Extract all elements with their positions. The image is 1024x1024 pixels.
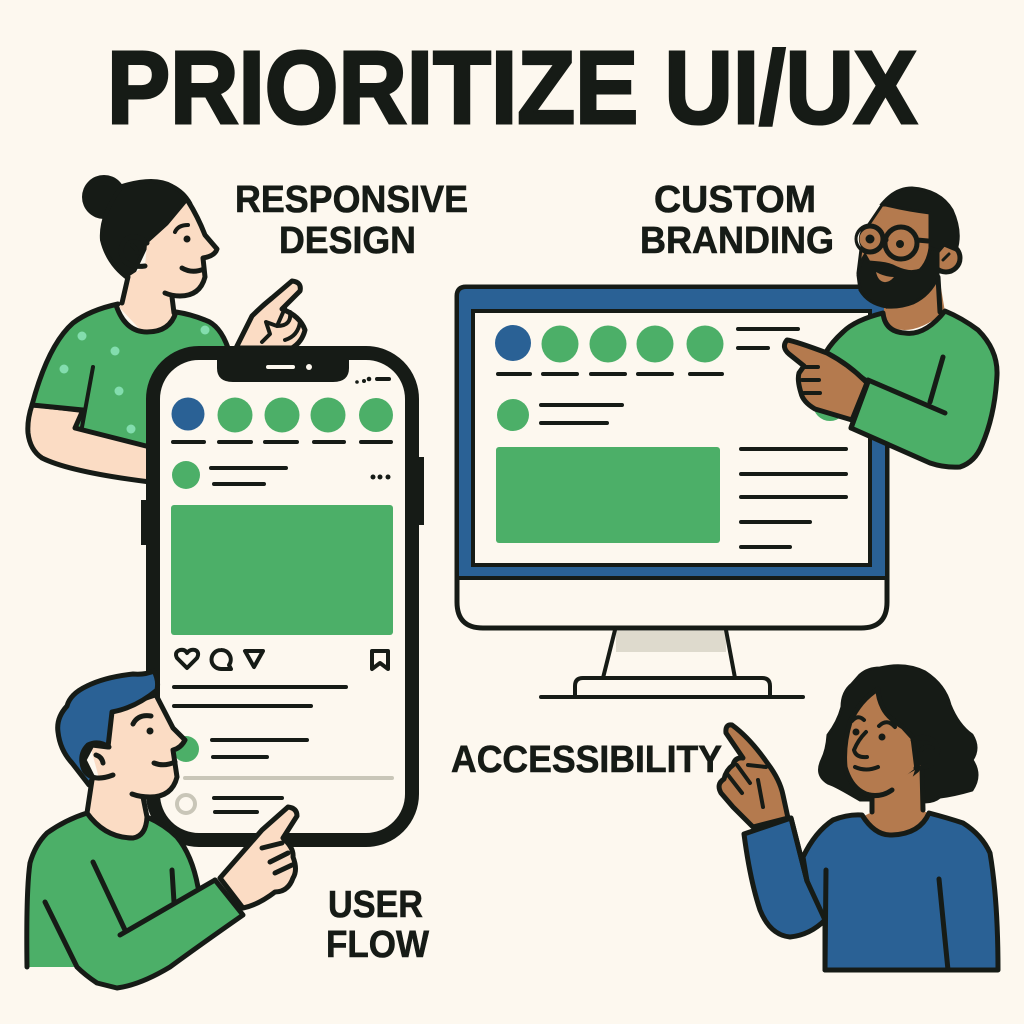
glasses — [857, 226, 928, 259]
person: responsive design — [28, 175, 305, 482]
shirt folds — [93, 862, 215, 935]
shirt — [32, 304, 228, 447]
icon: bookmark — [372, 651, 388, 669]
person: user flow — [27, 671, 297, 988]
label: accessibility: ACCESSIBILITY — [451, 739, 722, 781]
hair — [820, 666, 977, 802]
pointing hand — [236, 281, 305, 348]
side buttons — [141, 457, 424, 545]
comment row muted — [177, 795, 282, 813]
label: custom branding — [640, 179, 834, 262]
label: responsive design: DESIGN — [279, 220, 416, 262]
person: custom branding — [784, 188, 997, 467]
hair — [58, 671, 158, 785]
mouth — [876, 272, 894, 282]
sleeve — [744, 818, 825, 937]
ear — [82, 743, 113, 778]
monitor bezel — [459, 289, 885, 577]
label: user flow: FLOW — [326, 924, 429, 966]
divider — [185, 776, 392, 780]
hair — [882, 188, 958, 252]
screen text lines — [741, 449, 846, 547]
ear — [913, 737, 938, 768]
arm — [28, 405, 160, 482]
neck and face — [118, 201, 217, 340]
screen avatars — [495, 325, 724, 374]
neck — [862, 765, 930, 836]
monitor body — [457, 287, 887, 628]
shirt — [826, 311, 997, 467]
ear — [121, 237, 147, 266]
screen profile row — [497, 329, 798, 431]
face details — [96, 716, 175, 765]
comment row — [173, 736, 307, 762]
shirt folds — [791, 818, 948, 970]
shirt dots — [60, 326, 210, 434]
hand — [220, 807, 297, 908]
neck — [883, 270, 945, 330]
monitor screen — [473, 311, 870, 565]
shirt outline — [27, 780, 198, 967]
screen hero block — [496, 447, 720, 543]
icon: share — [245, 651, 263, 667]
hand — [719, 725, 788, 827]
label: user flow: USER — [328, 884, 423, 926]
monitor stand — [541, 630, 803, 697]
ear — [932, 244, 960, 272]
phone frame — [153, 353, 412, 840]
label: responsive design: RESPONSIVE — [235, 179, 468, 221]
caption lines — [174, 687, 346, 706]
face — [858, 205, 938, 307]
label: responsive design — [235, 179, 468, 262]
face — [845, 689, 917, 796]
notch — [217, 352, 349, 382]
label: custom branding: CUSTOM — [654, 179, 816, 221]
title: PRIORITIZE UI/UX — [107, 30, 917, 145]
label: custom branding: BRANDING — [640, 220, 834, 262]
sleeve folds — [851, 357, 945, 428]
smartphone — [141, 352, 424, 840]
ear detail — [943, 254, 949, 260]
arm outline — [45, 880, 243, 988]
desktop monitor — [457, 287, 887, 697]
icon: comment — [212, 650, 231, 669]
shirt — [803, 813, 998, 970]
post image — [171, 505, 393, 635]
person: accessibility — [719, 666, 998, 970]
face — [90, 697, 185, 797]
status indicators — [355, 377, 391, 384]
neck — [87, 775, 146, 838]
hair — [82, 175, 190, 280]
post header — [172, 461, 390, 489]
face details — [175, 225, 204, 271]
icon: heart — [176, 650, 198, 668]
story avatars — [172, 398, 393, 442]
beard — [858, 248, 938, 307]
hand — [784, 340, 867, 420]
face details — [852, 717, 932, 770]
label: user flow — [326, 884, 429, 966]
shirt fill — [27, 813, 243, 988]
